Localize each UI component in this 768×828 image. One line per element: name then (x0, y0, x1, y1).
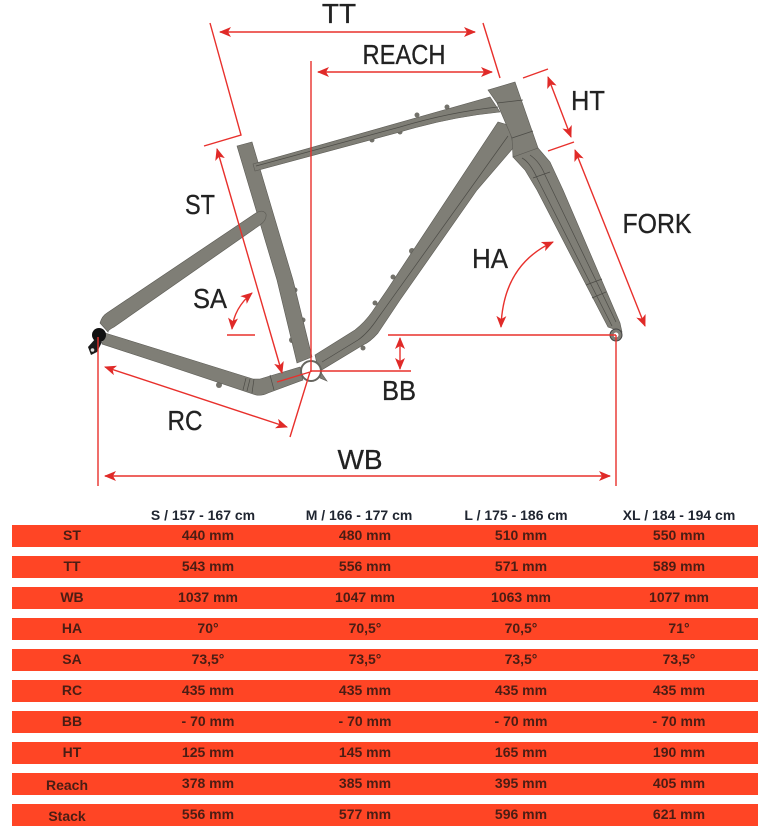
HT ticks (523, 69, 574, 151)
row BB: - 70 mm (182, 713, 234, 729)
top tube (253, 97, 500, 171)
dimension labels (168, 0, 692, 475)
row Stack: 621 mm (653, 806, 705, 822)
dimension labels: WB (337, 444, 383, 475)
dimension labels: BB (382, 375, 416, 406)
HT arrow (548, 77, 571, 137)
row HA: 70,5° (349, 620, 381, 636)
table header (151, 507, 735, 523)
WB extension lines (98, 335, 616, 486)
row Reach: 385 mm (339, 775, 391, 791)
table header: L / 175 - 186 cm (464, 507, 568, 523)
row ST: 440 mm (182, 527, 234, 543)
row SA (12, 649, 758, 671)
row HT: 145 mm (339, 744, 391, 760)
RC arrow (105, 367, 287, 427)
row Reach: Reach (46, 777, 88, 793)
dimension labels: HT (571, 85, 605, 116)
seat tube (237, 142, 312, 363)
row HT: 165 mm (495, 744, 547, 760)
dimension labels: SA (193, 283, 227, 314)
row ST: 480 mm (339, 527, 391, 543)
frame bosses (216, 104, 450, 388)
down tube (315, 122, 514, 381)
row BB: - 70 mm (653, 713, 705, 729)
row Reach: 395 mm (495, 775, 547, 791)
FORK arrow (575, 150, 645, 326)
row Reach: 378 mm (182, 775, 234, 791)
size table (12, 507, 758, 826)
bottom bracket (301, 361, 321, 381)
row ST: ST (63, 527, 81, 543)
row RC (12, 680, 758, 702)
row WB: 1047 mm (335, 589, 395, 605)
TT arrow (220, 31, 475, 33)
dimension labels: RC (168, 405, 202, 436)
vertical reach line (310, 61, 312, 372)
row Stack: 596 mm (495, 806, 547, 822)
row Stack (12, 804, 758, 826)
row WB: 1037 mm (178, 589, 238, 605)
table header: S / 157 - 167 cm (151, 507, 255, 523)
row BB: - 70 mm (495, 713, 547, 729)
table header: XL / 184 - 194 cm (623, 507, 735, 523)
REACH arrow (318, 71, 492, 73)
head tube (488, 82, 538, 157)
row SA: 73,5° (663, 651, 695, 667)
row TT: 571 mm (495, 558, 547, 574)
row SA: SA (62, 651, 82, 667)
row HA: 71° (668, 620, 690, 636)
row HA: HA (62, 620, 82, 636)
row SA: 73,5° (505, 651, 537, 667)
TT extension lines (204, 23, 500, 146)
row TT: 543 mm (182, 558, 234, 574)
row Reach: 405 mm (653, 775, 705, 791)
row HA (12, 618, 758, 640)
row BB: BB (62, 713, 82, 729)
dimension labels: FORK (622, 208, 692, 239)
dimension labels: ST (185, 189, 215, 220)
ST arrow (217, 149, 282, 373)
dimension labels: REACH (362, 39, 446, 70)
seat stay (100, 211, 266, 332)
row BB (12, 711, 758, 733)
bike frame diagram (88, 82, 622, 395)
row WB: 1063 mm (491, 589, 551, 605)
SA baseline (227, 334, 255, 336)
fork dropout (610, 329, 622, 341)
row RC: 435 mm (653, 682, 705, 698)
fork (513, 148, 622, 332)
row RC: 435 mm (495, 682, 547, 698)
row ST: 510 mm (495, 527, 547, 543)
row WB: WB (60, 589, 84, 605)
row RC: 435 mm (182, 682, 234, 698)
row HT (12, 742, 758, 764)
row RC: 435 mm (339, 682, 391, 698)
row HT: HT (63, 744, 82, 760)
row HT: 190 mm (653, 744, 705, 760)
row RC: RC (62, 682, 82, 698)
seat tube axis stub (277, 372, 310, 437)
row BB: - 70 mm (339, 713, 391, 729)
row ST (12, 525, 758, 547)
row HT: 125 mm (182, 744, 234, 760)
row HA: 70,5° (505, 620, 537, 636)
row WB (12, 587, 758, 609)
row WB: 1077 mm (649, 589, 709, 605)
HA angle arrow (501, 242, 553, 327)
row Stack: 577 mm (339, 806, 391, 822)
BB lines (310, 335, 616, 371)
dimension labels: HA (472, 243, 508, 274)
measurement lines and arrows (98, 23, 645, 486)
SA angle arrow (232, 293, 252, 329)
BB arrow (399, 338, 401, 369)
rear dropout (88, 328, 106, 355)
row TT: 556 mm (339, 558, 391, 574)
row HA: 70° (197, 620, 219, 636)
row ST: 550 mm (653, 527, 705, 543)
row Stack: Stack (48, 808, 86, 824)
row SA: 73,5° (349, 651, 381, 667)
row SA: 73,5° (192, 651, 224, 667)
row Reach (12, 773, 758, 795)
chain stay (102, 333, 303, 395)
row TT: 589 mm (653, 558, 705, 574)
row TT: TT (63, 558, 81, 574)
row TT (12, 556, 758, 578)
WB arrow (105, 475, 610, 477)
row Stack: 556 mm (182, 806, 234, 822)
table header: M / 166 - 177 cm (306, 507, 412, 523)
